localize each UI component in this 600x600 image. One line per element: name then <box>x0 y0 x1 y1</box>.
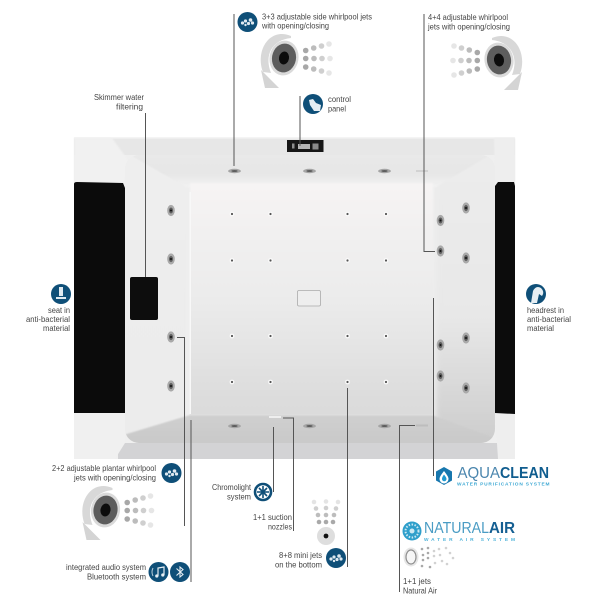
label: 3+3 jets <box>261 12 372 30</box>
wordmark: NATURAL <box>424 520 489 537</box>
illustration: mini jet <box>312 499 340 545</box>
tub floor <box>190 183 433 415</box>
control panel device <box>287 140 324 152</box>
headrest right <box>495 182 515 414</box>
label: suction nozzles: 1+1 suction <box>253 512 292 522</box>
basin <box>126 170 495 443</box>
label: 2+2 jets: 2+2 adjustable plantar whirlpool <box>52 463 156 473</box>
label: audio <box>66 562 146 582</box>
label: suction nozzles: nozzles <box>268 522 292 532</box>
label: 2+2 jets: jets with opening/closing <box>73 472 156 482</box>
tagline: WATER PURIFICATION SYSTEM <box>457 482 550 488</box>
icon: bluetooth <box>170 562 190 582</box>
label: 3+3 jets: 3+3 adjustable side whirlpool jets <box>262 12 372 22</box>
icon: headrest <box>526 284 546 304</box>
skimmer <box>130 277 158 320</box>
label: mini jets: 8+8 mini jets <box>279 550 322 560</box>
seat left <box>74 182 125 413</box>
label: mini jets: on the bottom <box>275 560 322 570</box>
wordmark <box>458 465 549 482</box>
label: skimmer: Skimmer water <box>94 92 144 102</box>
illustration: natural air jet <box>404 547 454 568</box>
wordmark: AIR <box>489 520 515 537</box>
callout: seat <box>26 284 71 333</box>
icon: whirlpool jet <box>450 36 522 90</box>
logo: AquaClean <box>436 465 550 488</box>
label: headrest <box>527 305 571 333</box>
wordmark: AQUA <box>458 465 501 482</box>
label: 3+3 jets: with opening/closing <box>261 20 329 30</box>
label: headrest: anti-bacterial <box>527 314 571 324</box>
label: chromolight <box>212 482 252 502</box>
label: control panel: panel <box>328 104 346 114</box>
label: suction nozzles <box>253 512 292 532</box>
callout: 8+8 mini jets <box>275 548 346 570</box>
label: natural air jets: 1+1 jets <box>403 576 431 586</box>
label: skimmer: filtering <box>116 102 143 112</box>
label: audio: integrated audio system <box>66 562 146 572</box>
label: 4+4 jets <box>427 12 510 32</box>
drain <box>298 290 320 306</box>
wordmark: CLEAN <box>500 465 549 482</box>
leader lines <box>146 14 435 592</box>
label: chromolight: Chromolight <box>212 482 252 492</box>
label: chromolight: system <box>227 492 251 502</box>
icon: water jets <box>162 463 182 483</box>
callout: headrest <box>526 284 571 333</box>
icon: seat <box>51 284 71 304</box>
callout: chromolight <box>212 482 271 502</box>
icon: shutter <box>255 484 271 500</box>
icon: music <box>148 562 168 582</box>
label: mini jets <box>275 550 322 570</box>
callout: audio and Bluetooth <box>66 562 190 582</box>
label: seat: anti-bacterial <box>26 314 70 324</box>
mini jets <box>230 212 388 384</box>
label: audio: Bluetooth system <box>87 572 146 582</box>
label: seat: seat in <box>48 305 70 315</box>
top and bottom jets <box>228 169 428 428</box>
logo: NaturalAir <box>402 520 515 543</box>
callout: 4+4 whirlpool jets <box>427 12 522 90</box>
tagline: WATER AIR SYSTEM <box>424 537 515 543</box>
label: natural air jets: Natural Air <box>403 586 437 596</box>
label: headrest: material <box>527 323 554 333</box>
label: natural air jets <box>403 576 437 596</box>
label: control panel: control <box>328 94 351 104</box>
label: 4+4 jets: 4+4 adjustable whirlpool <box>428 12 508 22</box>
label: headrest: headrest in <box>527 305 564 315</box>
callout: 3+3 side whirlpool jets <box>238 12 372 88</box>
icon: water jets <box>238 12 258 32</box>
callout: control panel <box>303 94 351 114</box>
side whirlpool jets <box>167 202 470 394</box>
label: 2+2 jets <box>52 463 156 482</box>
icon: water jets <box>326 548 346 568</box>
bathtub <box>74 137 515 459</box>
label: skimmer <box>94 92 144 112</box>
callout: 2+2 plantar jets <box>52 463 182 540</box>
label: seat: material <box>43 323 70 333</box>
label: seat <box>26 305 70 333</box>
icon: whirlpool jet <box>261 34 333 88</box>
label: 4+4 jets: jets with opening/closing <box>427 22 510 32</box>
icon: touch hand <box>303 94 323 114</box>
tub rim <box>74 137 515 459</box>
icon: hexagon drop <box>436 467 452 485</box>
label: control panel <box>328 94 351 114</box>
icon: whirlpool jet <box>82 486 154 540</box>
icon: air flake <box>402 522 422 540</box>
